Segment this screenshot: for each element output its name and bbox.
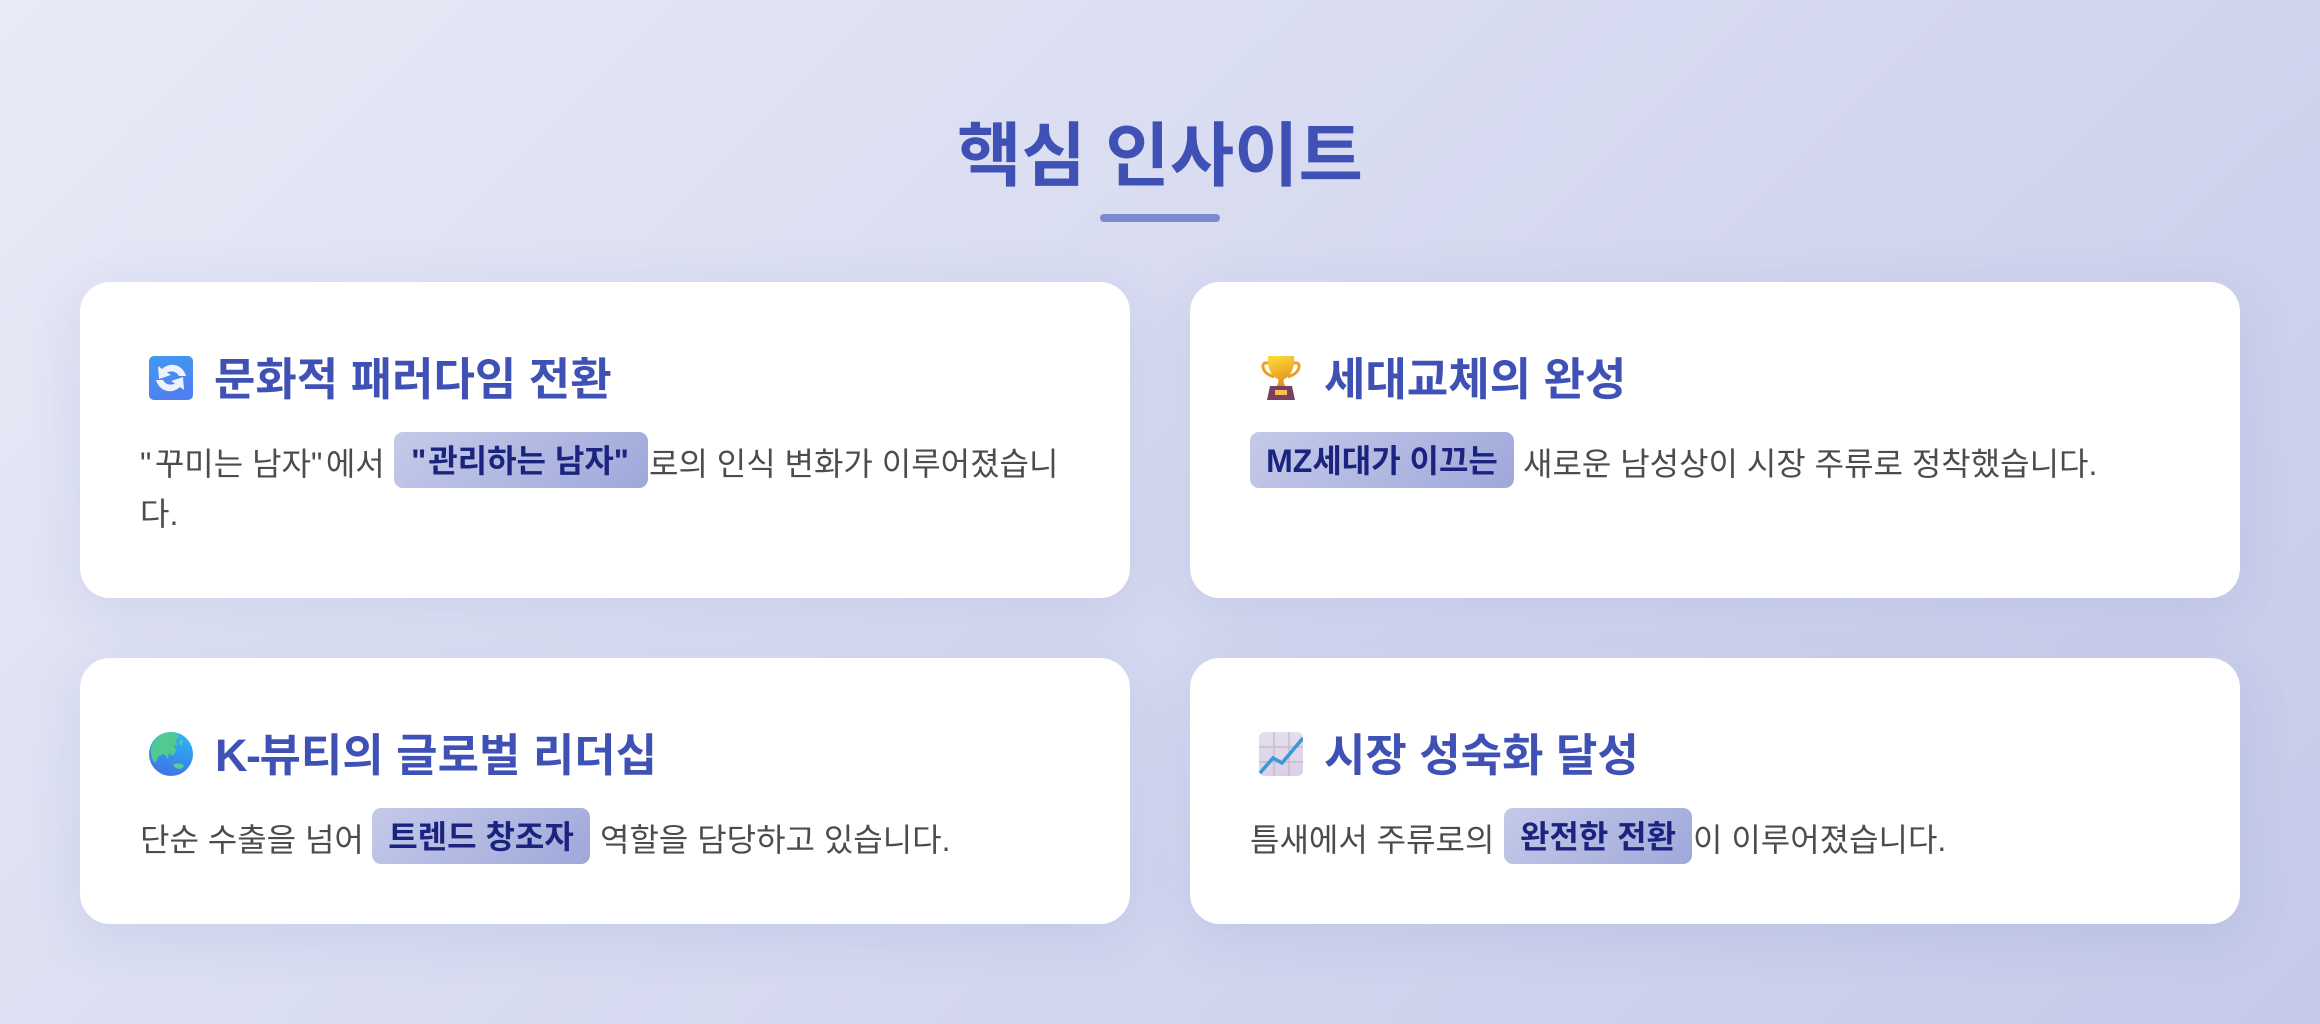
text segment: wrapped line: 다. [140,496,178,532]
panel: generational change [1190,282,2240,598]
highlight: led by MZ generation: MZ세대가 이끄는 [1266,443,1498,479]
text segment: 로의 인식 변화가 이루어졌습니 [649,446,1058,482]
icon: globe [149,732,193,776]
title underline [1100,214,1220,222]
body text with highlight [140,432,1058,532]
card heading: K-beauty global leadership [149,730,657,781]
heading text: 문화적 패러다임 전환 [214,354,612,405]
highlight: complete transition [1504,808,1692,864]
card heading: cultural paradigm shift [149,354,612,405]
icon: trophy [1261,356,1301,400]
highlight: trend creator [372,808,590,864]
heading text: 시장 성숙화 달성 [1324,730,1639,781]
panel: market maturity [1190,658,2240,924]
body text with highlight [1250,808,1946,864]
text segment: 새로운 남성상이 시장 주류로 정착했습니다. [1523,446,2097,482]
icon: rising chart [1259,732,1303,776]
text segment: 틈새에서 주류로의 [1250,822,1494,858]
title: 핵심 인사이트 [957,117,1363,195]
panel: K-beauty global leadership [80,658,1130,924]
highlight: led by MZ generation [1250,432,1514,488]
body text with highlight [140,808,951,864]
text segment: 이 이루어졌습니다. [1693,822,1946,858]
highlight: managing man: "관리하는 남자" [411,443,631,479]
card heading: market maturity [1259,730,1639,781]
text segment: 역할을 담당하고 있습니다. [600,822,951,858]
icon: refresh arrows [149,356,193,400]
heading text: 세대교체의 완성 [1324,354,1626,405]
highlight: managing man [394,432,648,488]
heading text: K-뷰티의 글로벌 리더십 [215,730,657,781]
body text with highlight [1250,432,2097,488]
highlight: trend creator: 트렌드 창조자 [388,819,574,855]
highlight: complete transition: 완전한 전환 [1520,819,1676,855]
text segment: "꾸미는 남자"에서 [140,446,385,482]
text segment: 단순 수출을 넘어 [140,822,364,858]
panel: cultural paradigm shift [80,282,1130,598]
card heading: generational change [1261,354,1626,405]
